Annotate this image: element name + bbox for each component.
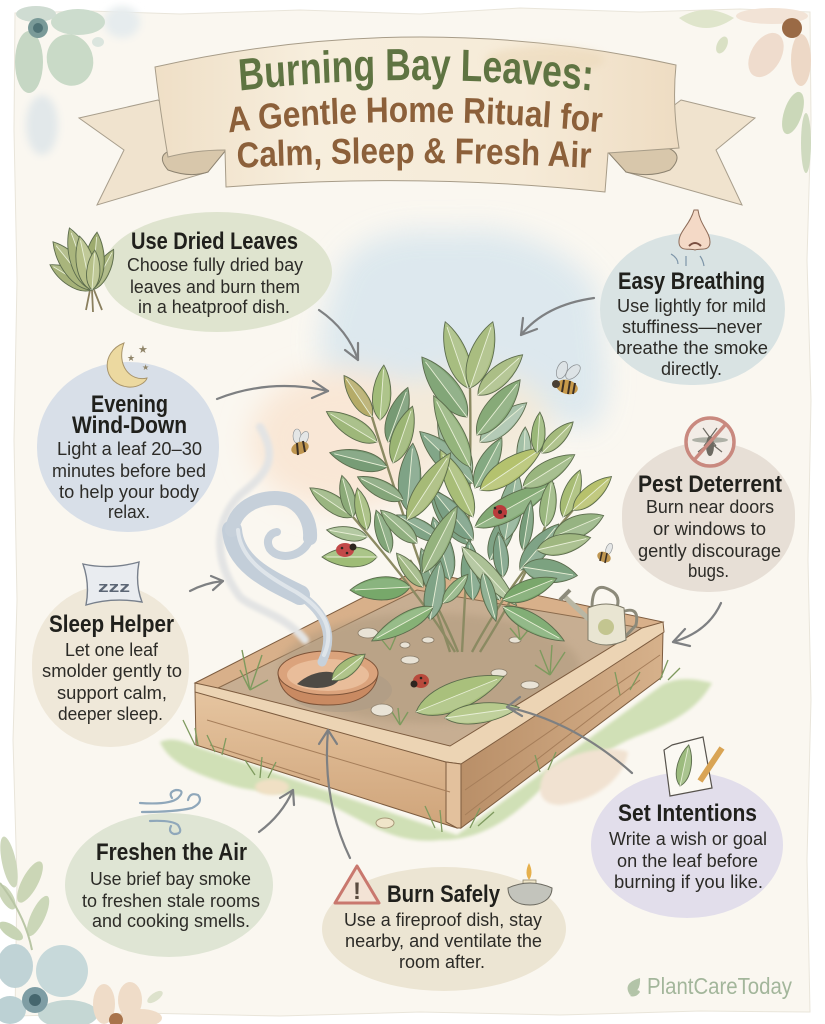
burnt leaf	[297, 672, 340, 688]
arrow: easy breathing	[521, 298, 594, 335]
panel: set intentions	[591, 737, 783, 918]
corner flower: top right	[679, 8, 811, 173]
body text	[344, 909, 543, 972]
body text: Light a leaf 20–30	[57, 438, 202, 459]
clay dish	[278, 648, 392, 712]
body text: Burn near doors	[646, 496, 774, 517]
arrow: evening wind-down	[217, 381, 328, 399]
arrow: set intentions	[507, 697, 632, 773]
callout blob	[32, 585, 189, 747]
icon: moon and stars	[107, 343, 149, 387]
body text: Choose fully dried bay	[127, 254, 304, 275]
ground grass wash	[160, 679, 712, 841]
body text: support calm,	[57, 682, 167, 703]
title banner	[78, 36, 756, 206]
right side wall	[461, 632, 663, 828]
body text: leaves and burn them	[130, 276, 300, 297]
watering can	[560, 587, 637, 645]
raised wooden garden bed	[183, 570, 680, 832]
body text: minutes before bed	[52, 460, 206, 481]
title line 3: Calm, Sleep & Fresh Air	[238, 137, 592, 170]
ribbon tan wash	[485, 46, 605, 74]
arrow: use dried leaves	[319, 310, 358, 360]
body text	[52, 438, 206, 522]
body text: breathe the smoke	[616, 337, 768, 358]
bay leaves on soil	[411, 663, 521, 728]
body text: to help your body	[59, 481, 200, 502]
heading	[72, 391, 187, 439]
back rim	[195, 570, 663, 690]
watercolor sky wash	[26, 6, 606, 510]
pebbles	[358, 628, 539, 716]
body text: Use a fireproof dish, stay	[344, 909, 543, 930]
body text: Let one leaf	[65, 639, 159, 660]
body text: to freshen stale rooms	[82, 890, 260, 911]
green leaf in dish	[327, 648, 370, 686]
body text	[616, 295, 768, 379]
icon: moon and stars: ★	[138, 344, 148, 356]
logo: plantcaretoday: PlantCareToday	[647, 973, 792, 999]
heading: Wind-Down	[72, 412, 187, 439]
heading: Sleep Helper	[49, 611, 174, 638]
body text	[127, 254, 304, 317]
ladybug on leaf left	[336, 543, 356, 557]
icon: pillow: zzz	[98, 579, 130, 596]
body text: smolder gently to	[42, 660, 182, 681]
panel: use dried leaves	[45, 212, 332, 332]
garden sprouts	[240, 625, 565, 725]
body text: Use lightly for mild	[617, 295, 766, 316]
icon: moon and stars: ★	[142, 363, 149, 372]
callout blob	[37, 362, 219, 532]
front leaves	[305, 318, 617, 649]
left ribbon tail	[79, 100, 208, 205]
heading: Freshen the Air	[96, 839, 247, 866]
body text: directly.	[661, 358, 722, 379]
callout blob	[65, 813, 273, 957]
panel: pest deterrent	[622, 418, 795, 592]
body text: deeper sleep.	[58, 703, 163, 724]
body text: room after.	[399, 951, 485, 972]
corner flowers: bottom left	[0, 835, 165, 1024]
arrow: burn safely	[319, 730, 350, 858]
icon: wind swirls	[140, 790, 200, 834]
smoke swirl	[220, 427, 328, 662]
title line 1: Burning Bay Leaves:	[240, 49, 591, 90]
grass tufts	[183, 660, 680, 832]
heading: Pest Deterrent	[638, 471, 782, 498]
title line 1	[240, 49, 591, 90]
panel: sleep helper	[32, 562, 189, 747]
body text: relax.	[108, 501, 150, 522]
icon: no bugs	[686, 418, 734, 466]
body text: Write a wish or goal	[609, 828, 767, 849]
body text: stuffiness—never	[622, 316, 762, 337]
heading: Use Dried Leaves	[131, 228, 298, 255]
heading: Evening	[91, 391, 168, 418]
icon: nose	[671, 210, 710, 266]
body text: and cooking smells.	[92, 910, 250, 931]
arrow: sleep helper	[190, 576, 223, 591]
callout blob	[322, 867, 566, 991]
bee left	[289, 429, 311, 457]
ladybug on soil	[410, 674, 429, 688]
callout blob	[622, 442, 795, 592]
panel: freshen the air	[65, 790, 273, 957]
icon: moon and stars: ★	[127, 353, 135, 363]
bee top right	[552, 360, 583, 397]
right ribbon fold	[606, 148, 677, 175]
body text	[609, 828, 767, 892]
icon: candle	[508, 863, 552, 905]
ladybug on leaf right	[493, 505, 507, 519]
plank lines	[207, 655, 660, 815]
body text: burning if you like.	[614, 871, 763, 892]
title line 2: A Gentle Home Ritual for	[229, 97, 603, 132]
body text	[82, 868, 260, 931]
body text: on the leaf before	[617, 850, 758, 871]
soil	[218, 590, 642, 748]
left front wall	[195, 690, 457, 828]
panel: burn safely	[322, 863, 566, 991]
panel: evening wind-down	[37, 343, 219, 532]
left ribbon fold	[162, 150, 226, 175]
body text	[42, 639, 182, 724]
heading: Easy Breathing	[618, 268, 765, 295]
back leaves	[393, 395, 566, 622]
body text: nearby, and ventilate the	[345, 930, 542, 951]
icon: warning triangle	[335, 866, 379, 905]
body text: Use brief bay smoke	[90, 868, 251, 889]
heading: Set Intentions	[618, 800, 757, 827]
body text: bugs.	[688, 560, 729, 581]
heading: Burn Safely	[387, 881, 501, 908]
callout blob	[591, 772, 783, 918]
stems	[353, 388, 573, 652]
body text: or windows to	[653, 518, 766, 539]
callout blob	[102, 212, 332, 332]
icon: leaf bundle	[45, 224, 120, 312]
bay plant	[305, 318, 617, 652]
panel: easy breathing	[600, 210, 785, 385]
bee right small	[596, 542, 614, 564]
icon: warning triangle: !	[353, 878, 361, 905]
icon: pillow	[83, 562, 142, 605]
arrow: pest deterrent	[673, 603, 721, 646]
ribbon main band	[155, 37, 679, 192]
corner post	[446, 762, 461, 828]
body text	[638, 496, 781, 581]
arrow: freshen the air	[259, 790, 294, 832]
top rim front	[195, 622, 664, 764]
title line 2	[229, 97, 603, 132]
icon: paper and pencil	[664, 737, 722, 796]
corner flower: top left	[15, 6, 105, 93]
body text: gently discourage	[638, 540, 781, 561]
callout blob	[600, 233, 785, 385]
body text: in a heatproof dish.	[138, 296, 290, 317]
right ribbon tail	[626, 100, 755, 205]
